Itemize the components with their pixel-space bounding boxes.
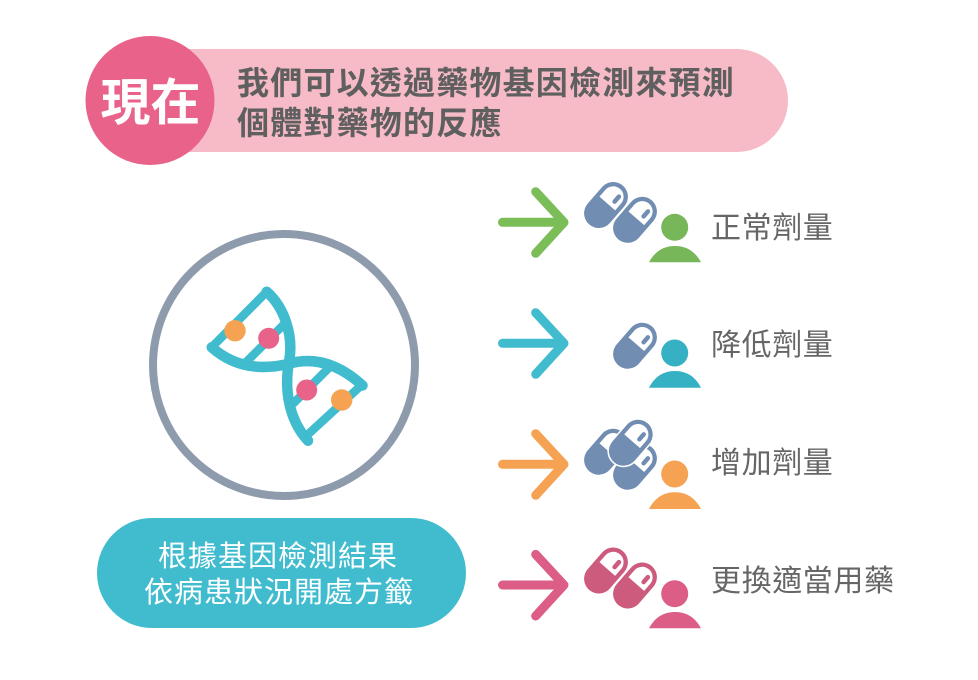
arrow: green [502,192,564,253]
icon: one pill [607,317,663,375]
banner pill background [120,49,788,152]
badge circle [86,36,214,165]
banner title: 我們可以透過藥物基因檢測來預測 [237,65,735,101]
arrow: teal [502,313,564,374]
icon: person teal [649,340,701,388]
arrow: pink [502,554,564,616]
badge text: 現在 [100,75,200,131]
ring [153,234,415,496]
icon: person orange [649,460,701,509]
icon: two pink pills [578,541,663,615]
row: normal dose [502,176,833,262]
row: reduce dose [502,313,833,388]
DNA circle icon [153,234,415,496]
icon: person pink [649,580,701,628]
row: increase dose [502,414,833,509]
banner title: 個體對藥物的反應 [237,105,503,141]
callout: prescribe according to test result: 根據基因檢測結果 [158,540,398,573]
label: 更換適當用藥 [711,565,895,598]
DNA strands and rungs [212,292,362,441]
icon: three pills [578,414,663,496]
header banner [86,36,788,165]
icon: person green [649,214,701,262]
callout: prescribe according to test result: 依病患狀況開處方籤 [144,576,414,609]
callout: prescribe according to test result [97,518,466,628]
row: change medication [502,541,895,628]
icon: two pills [578,176,663,249]
DNA base dots [224,320,352,411]
arrow: orange [502,434,564,495]
label: 增加劑量 [711,447,833,480]
label: 降低劑量 [711,329,833,362]
label: 正常劑量 [711,212,833,245]
